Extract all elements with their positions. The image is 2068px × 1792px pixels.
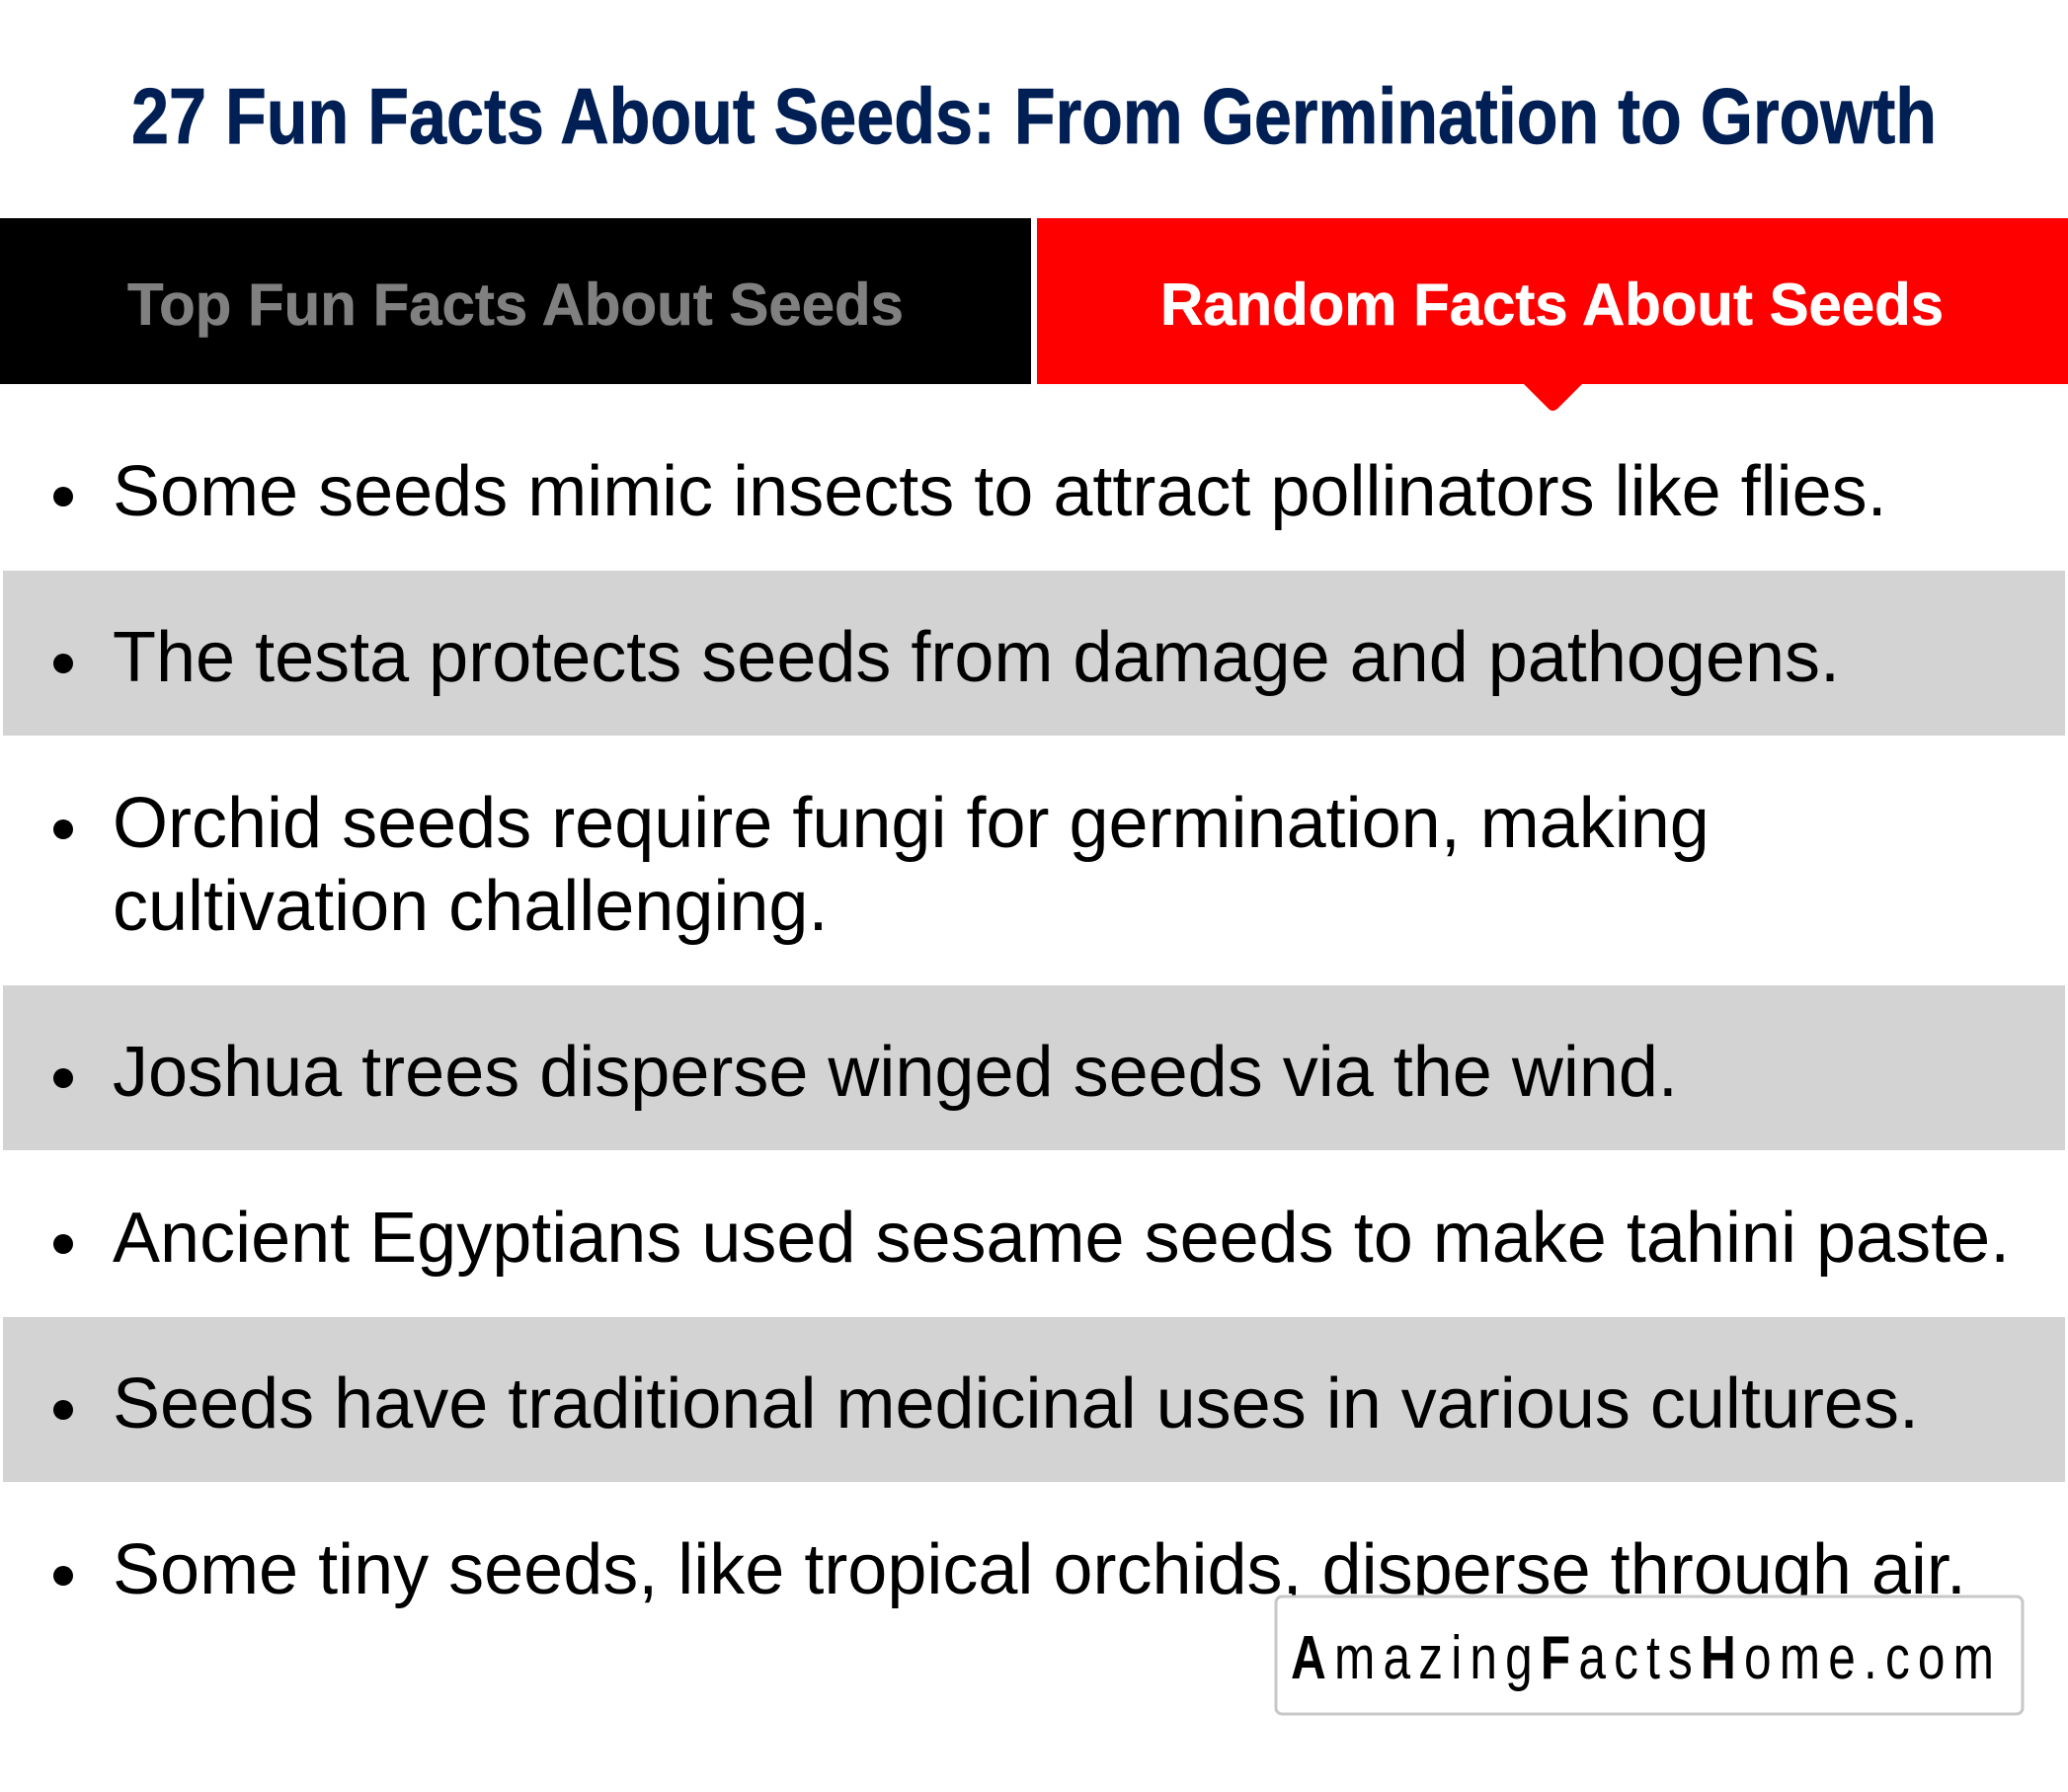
fact row 4 [3, 985, 2065, 1150]
fact row 3: cultivation challenging. [113, 867, 828, 946]
fact row 4: Joshua trees disperse winged seeds via the wind. [113, 1033, 1678, 1112]
fact row 7: Some tiny seeds, like tropical orchids, disperse through air. [113, 1530, 1966, 1609]
fact row 5: Ancient Egyptians used sesame seeds to make tahini paste. [113, 1199, 2010, 1278]
fact row 3: Orchid seeds require fungi for germination, making [113, 784, 1710, 863]
fact row 6 [3, 1317, 2065, 1482]
watermark badge: AmazingFactsHome.com [1291, 1623, 1994, 1691]
tab: top fun facts: Top Fun Facts About Seeds [127, 272, 904, 338]
fact row 2 [3, 571, 2065, 736]
watermark badge [1276, 1597, 2023, 1714]
tab: random facts (active): Random Facts About Seeds [1160, 272, 1944, 338]
fact row 2: The testa protects seeds from damage and pathogens. [113, 618, 1840, 697]
fact row 3 [53, 784, 1710, 946]
fact row 1: Some seeds mimic insects to attract pollinators like flies. [113, 452, 1887, 531]
fact row 6: Seeds have traditional medicinal uses in various cultures. [113, 1364, 1919, 1443]
tab: random facts (active) [1037, 218, 2068, 411]
tab: top fun facts [0, 218, 1031, 384]
